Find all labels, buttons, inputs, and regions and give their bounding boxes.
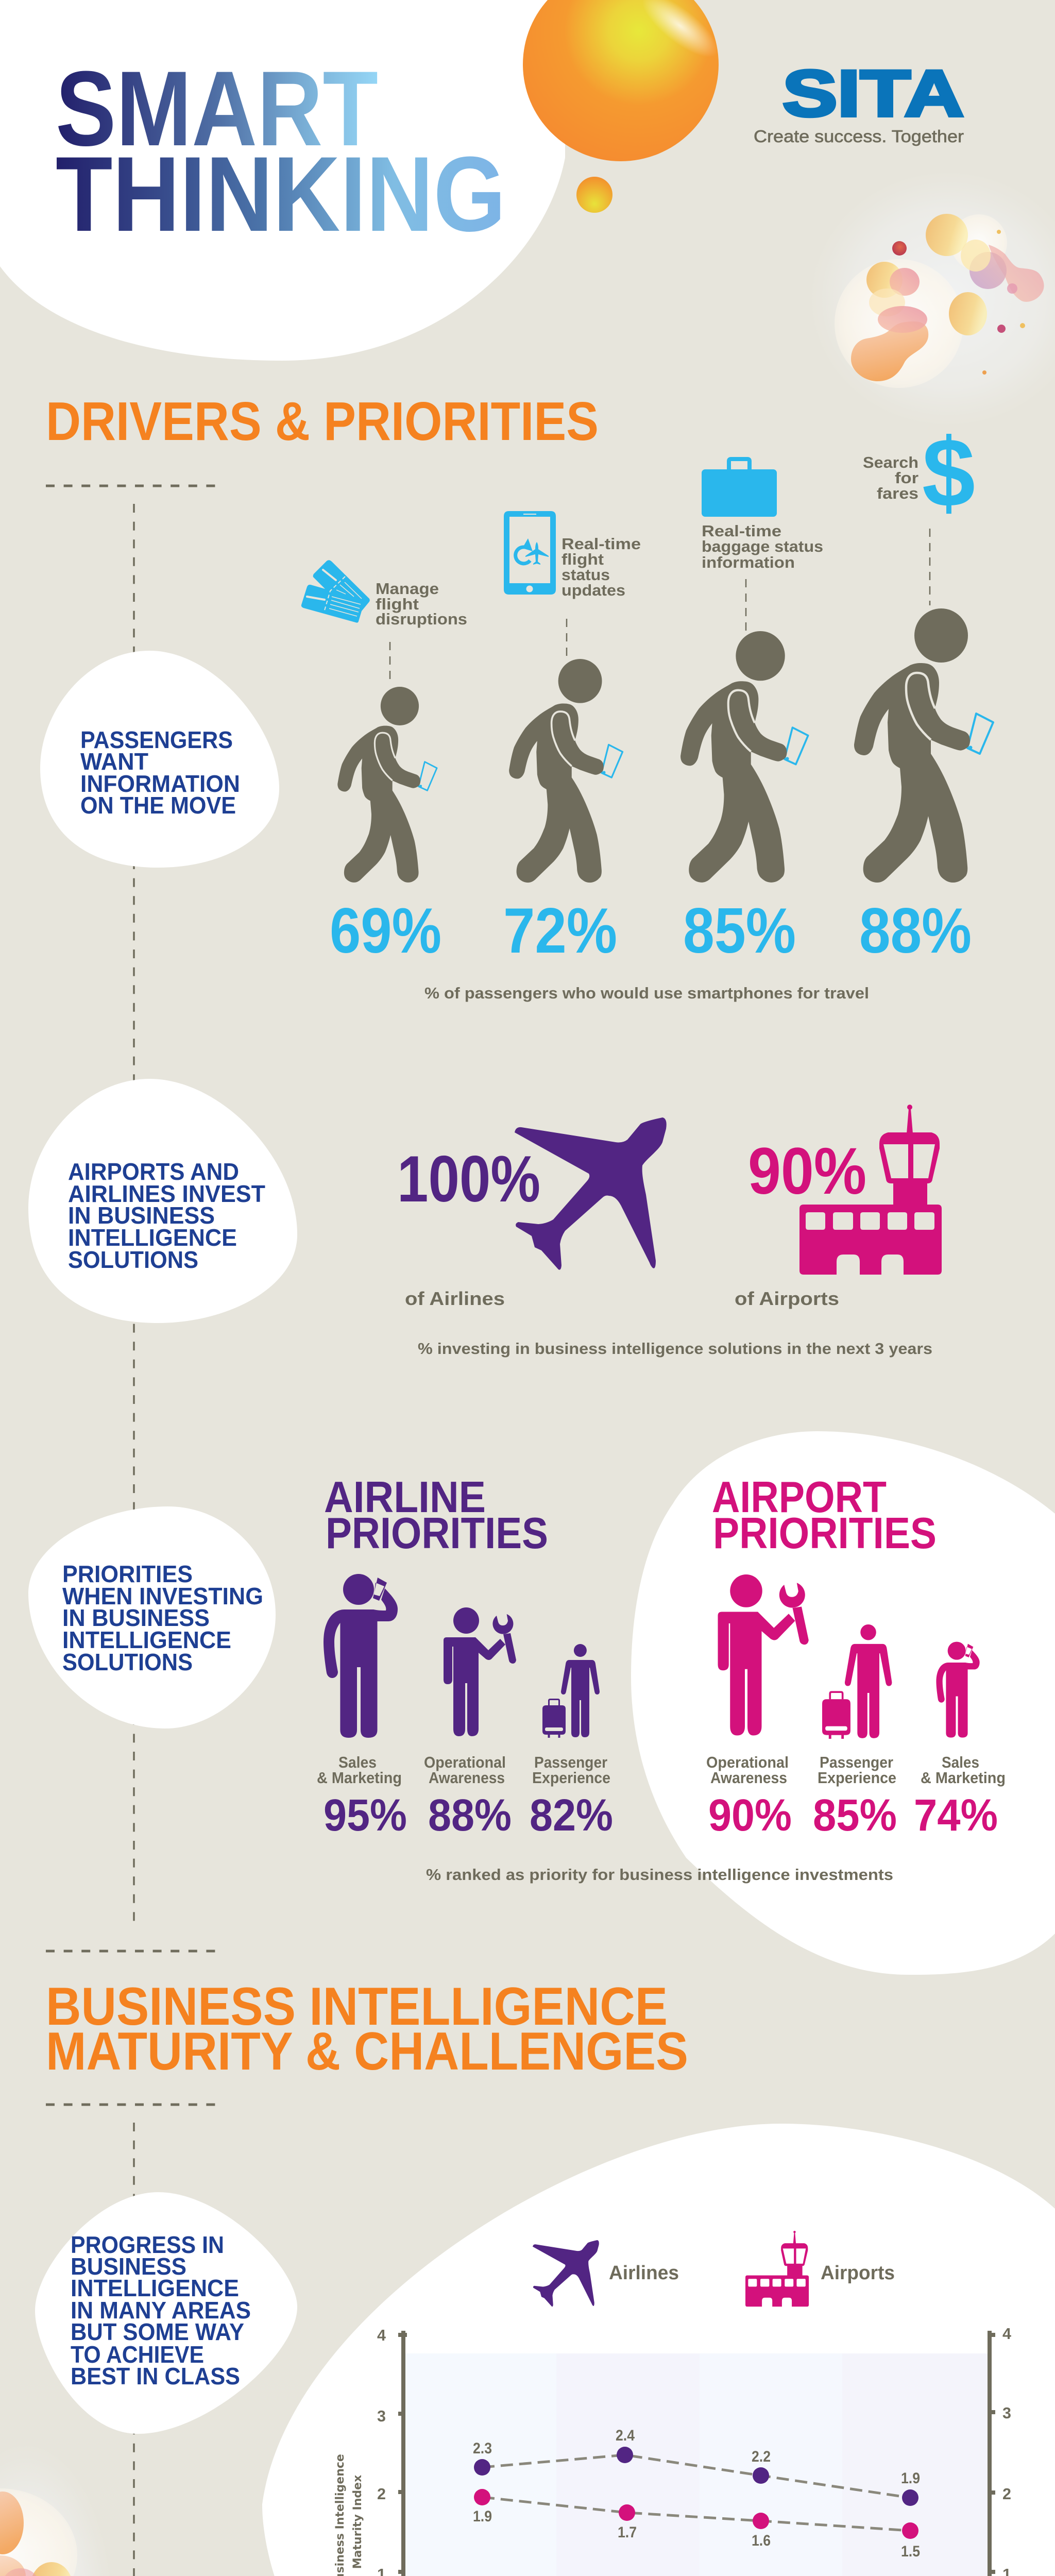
- label: sales and marketing airport: Sales: [942, 1753, 979, 1771]
- data labels: 2.4: [616, 2427, 635, 2444]
- label: manage flight disruptions: [376, 580, 467, 628]
- orange sphere: [523, 0, 727, 161]
- axis labels: 3: [1002, 2404, 1011, 2422]
- panel: progress in business intelligence: [35, 2192, 1012, 2576]
- heading: business intelligence maturity and challenges: BUSINESS INTELLIGENCE: [46, 1977, 668, 2037]
- axis labels: 2: [1002, 2485, 1011, 2503]
- text block: invest: [68, 1158, 265, 1273]
- caption: % investing in business intelligence solutions in the next 3 years: [418, 1340, 932, 1358]
- label: operational awareness: Awareness: [429, 1769, 505, 1787]
- text block: priorities: [62, 1561, 263, 1675]
- label: sales and marketing: [317, 1753, 402, 1787]
- data labels: 2.2: [752, 2448, 771, 2465]
- values: airport priorities: 85%: [813, 1790, 897, 1840]
- text block: invest: AIRPORTS AND: [68, 1158, 239, 1185]
- heading: drivers and priorities: DRIVERS & PRIORITIES: [46, 391, 599, 452]
- values: airport priorities: [708, 1790, 998, 1840]
- icon: briefcase: [702, 459, 777, 517]
- text block: passengers: WANT: [80, 748, 148, 775]
- icon: airport: [799, 1105, 942, 1275]
- blob: progress: [35, 2192, 297, 2434]
- SITA logo: SITA: [782, 57, 964, 130]
- legend: airlines: [533, 2240, 679, 2307]
- caption: % ranked as priority for business intelligence investments: [426, 1866, 893, 1884]
- axis labels: 3: [377, 2407, 386, 2425]
- title: THINKING: [56, 134, 506, 253]
- label: real-time baggage status: Real-time: [702, 522, 781, 540]
- title: SMART: [56, 49, 378, 168]
- figure: walking passenger 72%: [509, 659, 623, 883]
- text block: priorities: WHEN INVESTING: [62, 1583, 263, 1609]
- values: airline priorities: [324, 1790, 613, 1840]
- label: manage flight disruptions: disruptions: [376, 610, 467, 628]
- axis labels: [377, 2325, 1012, 2576]
- axis labels: 2: [377, 2485, 386, 2503]
- text block: invest: INTELLIGENCE: [68, 1224, 237, 1251]
- panel: airports and airlines invest: [28, 1079, 942, 1358]
- text block: progress: BUT SOME WAY: [71, 2318, 244, 2345]
- label: sales and marketing airport: [921, 1753, 1006, 1787]
- values: airline priorities: 82%: [530, 1790, 613, 1840]
- label: real-time baggage status: [702, 522, 823, 571]
- label: passenger experience airport: Experience: [818, 1769, 896, 1787]
- legend: airports: Airports: [821, 2262, 895, 2284]
- label: search for fares: [863, 453, 918, 502]
- text block: progress: [71, 2231, 251, 2389]
- values: airport priorities: 90%: [708, 1790, 792, 1840]
- blob: passengers: [40, 651, 279, 868]
- SITA logo: [754, 57, 964, 146]
- label: manage flight disruptions: Manage: [376, 580, 439, 598]
- legend: airports: [745, 2231, 895, 2307]
- data labels: 1.9: [473, 2508, 492, 2525]
- data labels: 1.7: [618, 2524, 637, 2541]
- value: 85%: 85%: [683, 895, 796, 967]
- title: [56, 49, 506, 253]
- text block: priorities: SOLUTIONS: [62, 1649, 193, 1675]
- value: 69%: 69%: [330, 895, 441, 967]
- axis labels: 4: [1002, 2325, 1012, 2343]
- heading: airport priorities: [712, 1473, 937, 1558]
- data labels: 1.6: [752, 2532, 771, 2549]
- series: airports: [474, 2489, 918, 2539]
- figure: walking passenger 85%: [680, 631, 808, 883]
- label: passenger experience: [532, 1753, 610, 1787]
- label: manage flight disruptions: flight: [376, 595, 419, 613]
- text block: invest: IN BUSINESS: [68, 1202, 215, 1229]
- icon: airline sales person: [324, 1574, 398, 1738]
- text block: invest: AIRLINES INVEST: [68, 1180, 265, 1207]
- values: airport priorities: 74%: [914, 1790, 998, 1840]
- value: 88%: 88%: [859, 895, 972, 967]
- text block: priorities: PRIORITIES: [62, 1561, 193, 1587]
- label: real-time flight status updates: status: [561, 566, 610, 584]
- line chart: maturity index: [334, 2325, 1012, 2576]
- y axis title: [334, 2454, 364, 2576]
- value: 72%: 72%: [503, 895, 617, 967]
- values: airline priorities: 88%: [428, 1790, 512, 1840]
- series: airlines: [474, 2447, 918, 2506]
- panel: airport priorities background: [631, 1431, 1055, 1975]
- heading: business intelligence maturity and challenges: MATURITY & CHALLENGES: [46, 2022, 688, 2081]
- label: operational awareness airport: Awareness: [710, 1769, 787, 1787]
- figure: walking passenger 69%: [337, 687, 437, 883]
- text block: passengers: PASSENGERS: [80, 726, 233, 753]
- data labels: 1.9: [901, 2470, 920, 2487]
- text block: priorities: IN BUSINESS: [62, 1604, 210, 1631]
- figure: walking passenger 88%: [854, 608, 993, 883]
- icon: airline passenger: [542, 1644, 600, 1738]
- icon: tickets: [301, 560, 370, 623]
- value: 90%: 90%: [748, 1134, 866, 1208]
- icon: airline operations person: [444, 1607, 516, 1736]
- text block: passengers: ON THE MOVE: [80, 792, 236, 819]
- panel: maturity chart background: [262, 2124, 1055, 2576]
- label: passenger experience airport: Passenger: [820, 1753, 893, 1771]
- heading: airline priorities: AIRLINE: [324, 1473, 486, 1522]
- axis labels: 4: [377, 2326, 386, 2344]
- text block: passengers: INFORMATION: [80, 770, 240, 797]
- label: real-time flight status updates: updates: [561, 581, 625, 599]
- panel: passengers want information: [40, 418, 993, 1002]
- values: airline priorities: 95%: [324, 1790, 407, 1840]
- heading: airport priorities: PRIORITIES: [713, 1509, 937, 1558]
- label: search for fares: fares: [877, 484, 918, 502]
- heading: business intelligence maturity and challenges: [46, 1977, 688, 2081]
- label: real-time flight status updates: [561, 535, 641, 599]
- heading: airport priorities: AIRPORT: [712, 1473, 887, 1522]
- text block: priorities: INTELLIGENCE: [62, 1626, 231, 1653]
- text block: progress: INTELLIGENCE: [71, 2275, 239, 2301]
- label: real-time flight status updates: Real-time: [561, 535, 641, 553]
- legend: airlines: Airlines: [609, 2262, 679, 2284]
- heading: airline priorities: PRIORITIES: [326, 1509, 548, 1558]
- label: search for fares: for: [895, 469, 918, 487]
- blob: invest: [28, 1079, 297, 1323]
- icon: dollar: $: [922, 418, 975, 528]
- icon: plane: [515, 1117, 667, 1270]
- label: search for fares: Search: [863, 453, 918, 471]
- label: operational awareness: [424, 1753, 506, 1787]
- label: of airports: of Airports: [735, 1288, 839, 1309]
- label: passenger experience: Passenger: [534, 1753, 607, 1771]
- icon: airport passenger: [822, 1624, 892, 1739]
- white header blob: [0, 0, 565, 361]
- bubble cluster: top right: [809, 170, 1055, 428]
- label: real-time baggage status: information: [702, 553, 795, 571]
- label: operational awareness airport: Operational: [706, 1753, 789, 1771]
- icon: airport operations person: [718, 1574, 809, 1735]
- text block: progress: BUSINESS: [71, 2253, 186, 2280]
- text block: progress: PROGRESS IN: [71, 2231, 224, 2258]
- bubble cluster: left: [0, 2442, 113, 2576]
- blob: priorities: [28, 1506, 276, 1728]
- data labels: [473, 2427, 920, 2560]
- icon: airport sales person: [936, 1642, 980, 1738]
- label: sales and marketing: Sales: [338, 1753, 377, 1771]
- heading: airline priorities: [324, 1473, 548, 1558]
- small orange drop: [576, 177, 612, 213]
- label: passenger experience: Experience: [532, 1769, 610, 1787]
- label: sales and marketing: & Marketing: [317, 1769, 402, 1787]
- icon: tablet with flight status: [504, 511, 556, 595]
- y axis title: Maturity Index: [351, 2475, 364, 2569]
- panel: priorities: [28, 1473, 1006, 1884]
- label: real-time baggage status: baggage status: [702, 537, 823, 555]
- text block: progress: BEST IN CLASS: [71, 2363, 240, 2389]
- text block: passengers: [80, 726, 240, 819]
- text block: progress: IN MANY AREAS: [71, 2297, 251, 2324]
- label: sales and marketing airport: & Marketing: [921, 1769, 1006, 1787]
- label: passenger experience airport: [818, 1753, 896, 1787]
- label: of airlines: of Airlines: [405, 1288, 505, 1309]
- SITA logo: Create success. Together: [754, 127, 964, 146]
- label: operational awareness airport: [706, 1753, 789, 1787]
- label: real-time flight status updates: flight: [561, 550, 604, 568]
- value: 100%: 100%: [397, 1142, 540, 1215]
- caption: % of passengers who would use smartphones for travel: [424, 984, 869, 1002]
- data labels: 1.5: [901, 2543, 920, 2560]
- text block: invest: SOLUTIONS: [68, 1246, 198, 1273]
- label: operational awareness: Operational: [424, 1753, 506, 1771]
- text block: progress: TO ACHIEVE: [71, 2341, 204, 2368]
- data labels: 2.3: [473, 2440, 492, 2457]
